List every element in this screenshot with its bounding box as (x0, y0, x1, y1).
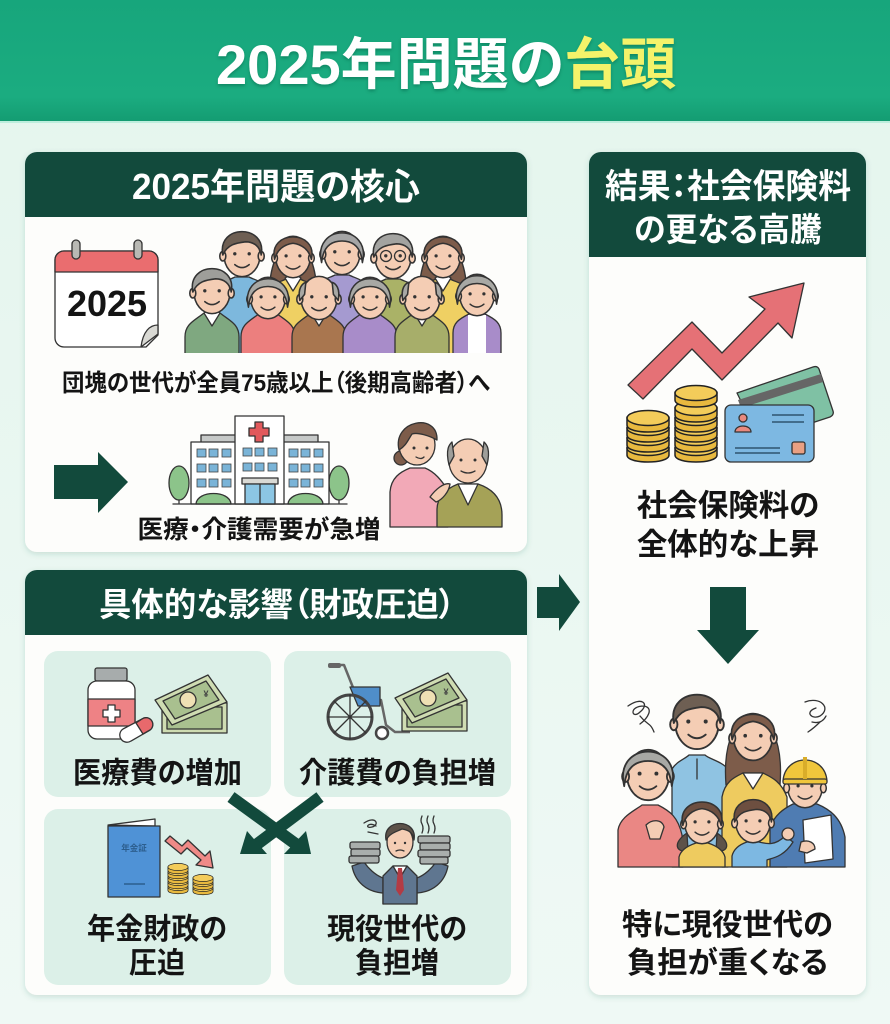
text: 特に現役世代の負担が重くなる: 特に現役世代の (622, 909, 833, 942)
arrow: to result (537, 574, 580, 631)
card: 介護費の負担増 (284, 651, 511, 797)
panel heading: 結果: の更なる高騰 (634, 211, 822, 248)
text: 医療介護需要が急増: 医療・介護需要が急増 (138, 515, 380, 544)
text: 団塊の世代: 団塊の世代が全員75歳以上（後期高齢者）へ (62, 369, 491, 397)
text: 社会保険料の全体的な上昇: 全体的な上昇 (637, 528, 819, 562)
card: 年金財政の圧迫 (44, 809, 271, 985)
panel: 具体的な影響 (25, 570, 527, 995)
panel heading: 核心: 2025年問題の核心 (132, 166, 420, 207)
card label: 医療費の増加 (73, 757, 242, 790)
title text: 2025年問題の台頭 (216, 33, 676, 96)
icon: insurance cards (725, 367, 833, 462)
illustration: worried family (618, 695, 845, 867)
illustration: hospital (169, 416, 349, 504)
panel heading: 結果 (589, 152, 866, 257)
text: 特に現役世代の負担が重くなる: 負担が重くなる (627, 946, 828, 980)
text: 社会保険料の全体的な上昇: 社会保険料の (637, 489, 819, 523)
icon: stressed worker (349, 816, 450, 904)
text: 特に現役世代の負担が重くなる (622, 909, 833, 980)
text: 社会保険料の全体的な上昇 (637, 489, 819, 562)
icon: pension book (108, 819, 160, 897)
arrow: right (54, 452, 128, 513)
icon: banknotes (155, 675, 227, 733)
panel heading: 財政圧迫: 具体的な影響（財政圧迫） (99, 586, 455, 623)
panel: 2025年問題の核心 (25, 152, 527, 552)
panel heading: 結果: 結果：社会保険料 (605, 168, 851, 206)
icon: calendar 2025: 2025 (67, 283, 147, 324)
arrow: down (697, 587, 759, 664)
panel heading: 核心 (25, 152, 527, 217)
icon: medicine bottle (88, 668, 153, 742)
panel heading: 財政圧迫 (25, 570, 527, 635)
card: 医療費の増加 (44, 651, 271, 797)
card label: 年金財政の (87, 913, 227, 946)
icon: pension book: 年金証 (121, 843, 147, 853)
icon: falling arrow (165, 836, 213, 868)
arrows: crossing (231, 797, 320, 854)
icon: coins (168, 863, 213, 895)
icon: coin stacks (627, 386, 717, 462)
icon: banknotes (395, 673, 467, 731)
card label line 2: 負担増 (355, 947, 439, 980)
card: 現役世代の負担増 (284, 809, 511, 985)
illustration: elderly crowd (185, 231, 501, 365)
card label: 現役世代の (327, 913, 467, 946)
icon: rising arrow (628, 283, 804, 399)
icon: wheelchair (328, 663, 410, 739)
panel: 結果 (589, 152, 866, 995)
title banner (0, 0, 890, 123)
icon: calendar 2025 (55, 240, 158, 347)
card label: 介護費の負担増 (299, 757, 496, 790)
card label line 2: 圧迫 (129, 947, 185, 980)
illustration: caregiver and elderly man (390, 423, 502, 527)
